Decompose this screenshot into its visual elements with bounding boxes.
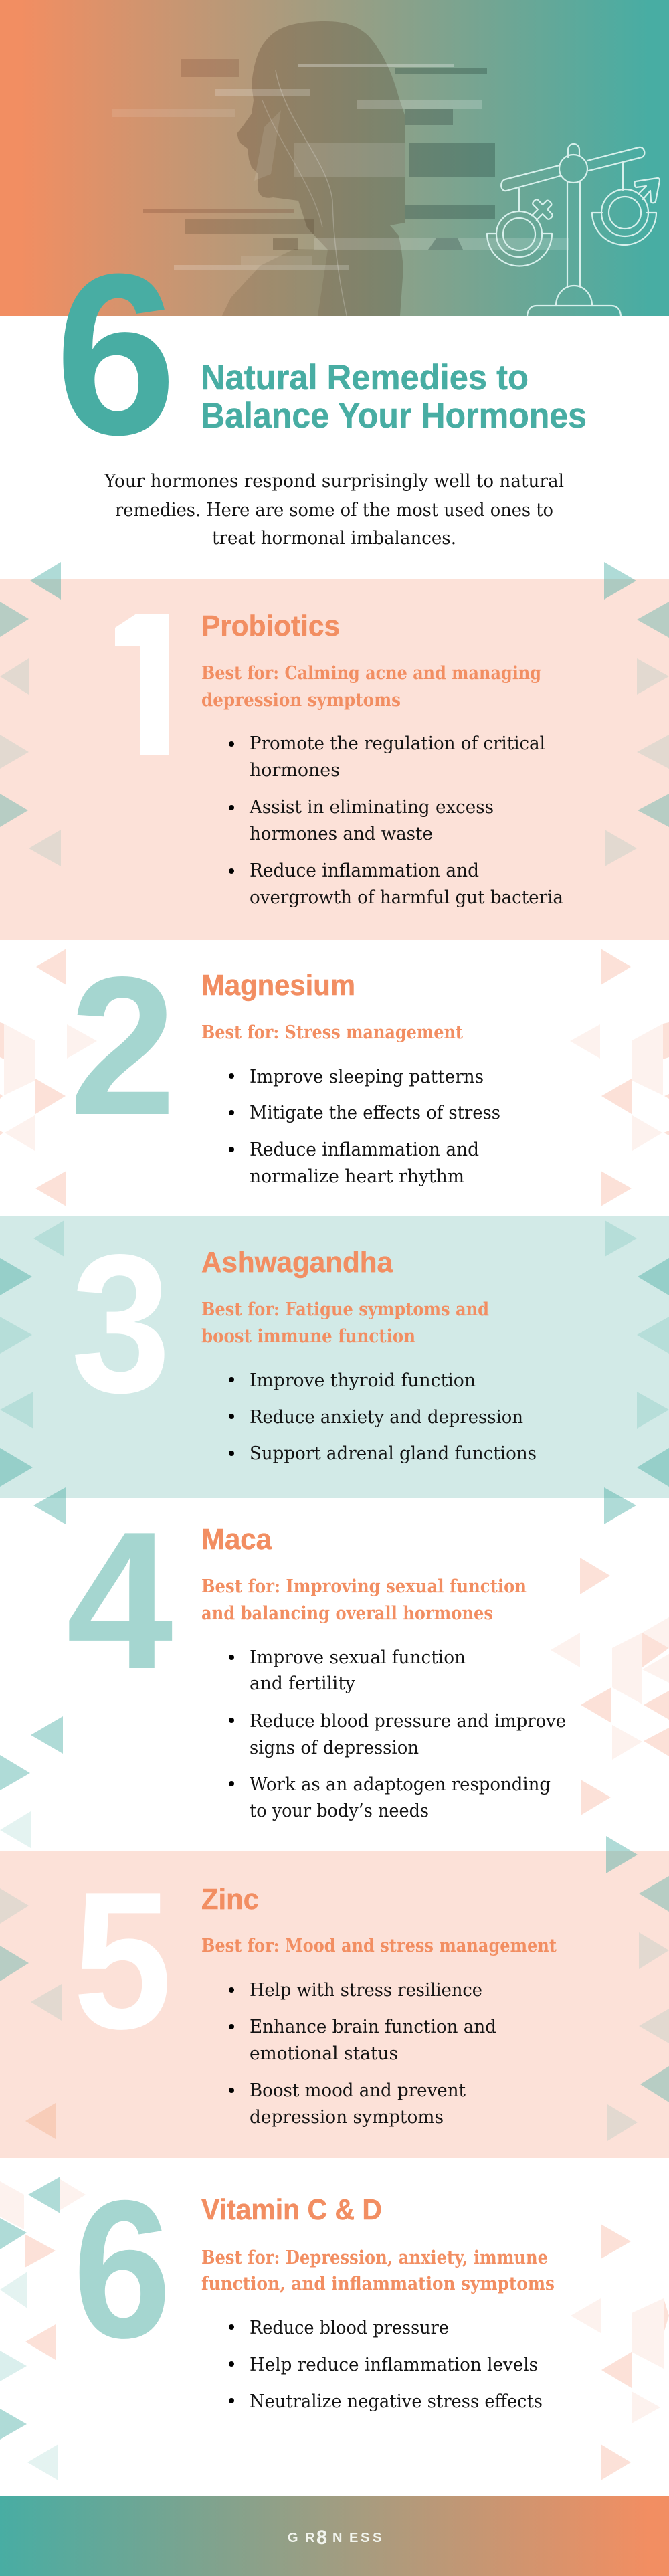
- logo: GR8NESS: 8: [316, 2526, 327, 2549]
- triangle pattern: [0, 1836, 669, 2141]
- bullet list: Neutralize negative stress effects: [250, 2391, 543, 2412]
- best for: [201, 1576, 527, 1624]
- bullet list: and fertility: [250, 1673, 356, 1694]
- bullet list: Reduce blood pressure and improve: [250, 1711, 566, 1732]
- panel: zinc: [0, 1836, 669, 2158]
- bullet list: [229, 733, 563, 908]
- bullet list: overgrowth of harmful gut bacteria: [250, 887, 563, 908]
- bullet list: Work as an adaptogen responding: [250, 1774, 551, 1795]
- title: [201, 358, 587, 436]
- bullet list: [229, 2318, 543, 2412]
- triangle pattern left: [0, 949, 97, 1206]
- number 5: 5: [73, 1851, 172, 2070]
- heading: Magnesium: [201, 969, 355, 1002]
- best for: Best for: Depression, anxiety, immune: [201, 2247, 548, 2268]
- best for: and balancing overall hormones: [201, 1603, 493, 1624]
- bullet list: Assist in eliminating excess: [249, 797, 494, 818]
- heading: Vitamin C & D: [201, 2193, 382, 2226]
- number 6: 6: [73, 2160, 171, 2379]
- number 1: 1: [106, 578, 215, 797]
- bullet list: Mitigate the effects of stress: [250, 1103, 500, 1123]
- bullet list: Support adrenal gland functions: [250, 1443, 537, 1464]
- best for: [201, 663, 541, 711]
- best for: Best for: Calming acne and managing: [201, 663, 541, 684]
- logo: GR8NESS: NESS: [332, 2531, 381, 2545]
- heading: Probiotics: [201, 610, 340, 642]
- bullet list: Reduce blood pressure: [250, 2318, 449, 2338]
- title: Natural Remedies to: [201, 358, 529, 397]
- icon: balance scale with gender symbols: [487, 144, 660, 316]
- bullet list: Reduce inflammation and: [250, 1139, 479, 1160]
- intro paragraph: remedies. Here are some of the most used ones to: [115, 500, 553, 521]
- bullet list: Improve sexual function: [250, 1647, 466, 1668]
- triangle pattern: [0, 562, 669, 866]
- bullet list: signs of depression: [250, 1738, 419, 1758]
- bullet list: to your body’s needs: [250, 1801, 429, 1821]
- triangle pattern: [0, 2177, 669, 2480]
- best for: boost immune function: [201, 1326, 415, 1347]
- woman silhouette illustration: [222, 21, 405, 405]
- best for: Best for: Mood and stress management: [201, 1936, 557, 1956]
- best for: Best for: Improving sexual function: [201, 1576, 527, 1597]
- best for: depression symptoms: [201, 690, 401, 711]
- panel: magnesium: [0, 935, 669, 1206]
- bullet list: Reduce inflammation and: [250, 860, 479, 881]
- bullet list: [229, 1647, 566, 1821]
- hero banner: [0, 0, 669, 405]
- intro paragraph: Your hormones respond surprisingly well to natural: [104, 471, 564, 492]
- number 1: [115, 614, 169, 755]
- best for: Best for: Fatigue symptoms and: [201, 1299, 489, 1320]
- panel: ashwagandha: [0, 1213, 669, 1524]
- panel: vitamin c and d: [0, 2160, 669, 2480]
- bullet list: [229, 1980, 496, 2128]
- title: Balance Your Hormones: [201, 396, 587, 436]
- best for: [201, 1299, 489, 1347]
- best for: Best for: Stress management: [201, 1022, 463, 1043]
- triangle pattern: [0, 1558, 669, 1848]
- intro paragraph: [104, 471, 564, 549]
- triangle pattern: [0, 1220, 669, 1524]
- bullet list: [229, 1067, 500, 1187]
- number 4: 4: [66, 1491, 175, 1710]
- number 3: 3: [71, 1213, 171, 1434]
- bullet list: hormones and waste: [250, 824, 433, 844]
- triangle pattern right: [570, 949, 669, 1206]
- heading: Zinc: [201, 1883, 259, 1916]
- bullet list: Improve sleeping patterns: [250, 1067, 484, 1087]
- bullet list: Improve thyroid function: [250, 1370, 476, 1391]
- glitch bars over silhouette: [112, 59, 569, 270]
- footer: [0, 2496, 669, 2576]
- bullet list: [229, 1370, 537, 1464]
- number 2: 2: [70, 935, 176, 1156]
- big number 6: 6: [55, 225, 177, 482]
- heading: Ashwagandha: [201, 1246, 393, 1279]
- bullet list: emotional status: [250, 2043, 398, 2064]
- intro paragraph: treat hormonal imbalances.: [212, 528, 456, 549]
- best for: function, and inflammation symptoms: [201, 2274, 555, 2294]
- bullet list: depression symptoms: [250, 2107, 444, 2128]
- heading: Maca: [201, 1523, 272, 1556]
- panel: maca: [0, 1491, 669, 1848]
- bullet list: Boost mood and prevent: [250, 2080, 466, 2101]
- bullet list: Help reduce inflammation levels: [250, 2355, 538, 2375]
- bullet list: Promote the regulation of critical: [250, 733, 545, 754]
- bullet list: Enhance brain function and: [250, 2017, 496, 2037]
- bullet list: Help with stress resilience: [250, 1980, 482, 2001]
- panel: probiotics: [0, 562, 669, 940]
- bullet list: hormones: [250, 760, 340, 781]
- bullet list: normalize heart rhythm: [250, 1166, 464, 1187]
- bullet list: Reduce anxiety and depression: [250, 1407, 523, 1428]
- logo: GR8NESS: GR: [288, 2531, 315, 2545]
- logo: GR8NESS: [288, 2526, 381, 2549]
- best for: [201, 2247, 555, 2294]
